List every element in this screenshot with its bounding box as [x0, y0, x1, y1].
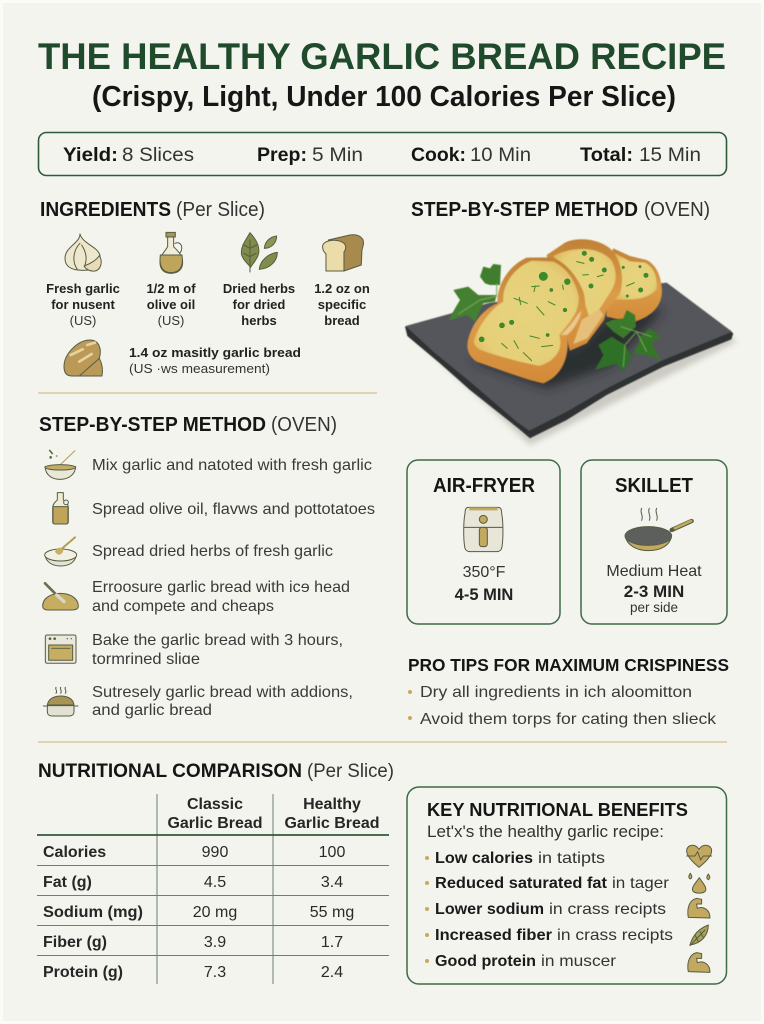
icon: muscle arm sodium [688, 898, 710, 918]
icon: serving dish [43, 687, 78, 716]
title: (Crispy, Light, Under 100 Calories Per Slice) [92, 81, 676, 113]
tip 2: Avoid them torps for cating then slieck [420, 711, 717, 728]
ingredients heading: INGREDIENTS [40, 199, 171, 221]
benefit 2: Reduced saturated fat [435, 875, 608, 892]
air-fryer settings: 350°F [463, 564, 506, 581]
panel: skillet [581, 460, 727, 624]
recipe timing bar: Total: [580, 144, 633, 166]
comparison table: 4.5 [204, 874, 226, 891]
benefit 2 [425, 875, 670, 892]
icon: skillet [625, 508, 692, 551]
ingredient labels: 1.2 oz on [314, 281, 370, 296]
icon: garlic bread loaf [64, 340, 103, 376]
ingredient labels: herbs [241, 313, 277, 328]
step 4 text [92, 579, 350, 615]
bread shadow on slate [470, 303, 663, 388]
step 5 text [92, 632, 343, 668]
garlic bread measurement text: (US ·ws measurement) [129, 361, 270, 376]
icon: garlic [65, 234, 101, 271]
comparison table: 55 mg [310, 904, 354, 921]
comparison table: Sodium (mg) [43, 904, 143, 921]
recipe timing bar: 8 Slices [122, 144, 194, 166]
comparison table: Fiber (g) [43, 934, 107, 951]
ingredient labels: for dried [233, 297, 285, 312]
comparison table: Protein (g) [43, 964, 123, 981]
icon: air fryer [464, 507, 503, 552]
air-fryer heading: AIR-FRYER [433, 475, 536, 497]
garlic bread measurement text [129, 345, 301, 376]
comparison table [37, 794, 389, 984]
icon: bread slice [323, 235, 364, 271]
comparison heading: (Per Slice) [307, 761, 394, 782]
panel: key nutritional benefits [407, 787, 726, 984]
title [38, 36, 726, 113]
comparison table: Healthy [303, 796, 361, 813]
panel: oven steps [39, 414, 375, 719]
benefit 3 [425, 901, 666, 918]
ingredient labels: specific [318, 297, 366, 312]
ingredients heading [40, 199, 265, 221]
skillet settings: 2-3 MIN [624, 582, 684, 601]
comparison table: Fat (g) [43, 874, 92, 891]
ingredient labels: (US) [158, 313, 184, 328]
icon: wheat [690, 925, 708, 946]
recipe timing bar: Cook: [411, 144, 466, 166]
panel: air-fryer [407, 460, 560, 624]
ingredient labels: for nusent [51, 297, 115, 312]
bread slice back [603, 248, 662, 323]
air-fryer settings: 4-5 MIN [455, 586, 513, 604]
air-fryer settings [455, 564, 513, 604]
benefit 2: in tager [612, 875, 670, 892]
ingredient labels: bread [324, 313, 360, 328]
panel: nutritional comparison [37, 761, 394, 984]
comparison table: 7.3 [204, 964, 226, 981]
step 5 text: Bake the garlic bread with 3 hours, [92, 632, 343, 649]
panel: pro tips [408, 655, 729, 728]
parsley left [448, 264, 501, 322]
skillet heading: SKILLET [615, 475, 693, 497]
icon: muscle arm protein [688, 953, 710, 972]
icon: bowl with spatula [45, 537, 77, 566]
step 1 text: Mix garlic and natoted with fresh garlic [92, 457, 372, 474]
icon: mixing bowl [45, 450, 76, 479]
ingredient labels: Dried herbs [223, 281, 295, 296]
comparison table: 990 [202, 844, 228, 861]
benefit 1: Low calories [435, 850, 533, 867]
comparison table: Garlic Bread [168, 815, 262, 832]
ingredients heading: (Per Slice) [176, 199, 265, 221]
comparison table: 20 mg [193, 904, 237, 921]
icon: spreading on bread [43, 583, 78, 610]
comparison table: Calories [43, 844, 106, 861]
ingredient labels: (US) [70, 313, 96, 328]
benefits heading: Let'x's the healthy garlic recipe: [427, 823, 664, 841]
recipe timing bar [38, 132, 726, 176]
icon: heart [687, 845, 712, 867]
step 6 text: Sutresely garlic bread with addions, [92, 684, 353, 701]
panel: ingredients [40, 199, 370, 376]
skillet settings: per side [630, 600, 678, 615]
recipe timing bar: 5 Min [312, 144, 363, 166]
skillet settings: Medium Heat [606, 563, 702, 580]
ingredient labels: olive oil [147, 297, 195, 312]
right column heading: STEP-BY-STEP METHOD [411, 199, 638, 221]
comparison table: Classic [187, 796, 243, 813]
slate board [405, 283, 733, 438]
steps heading: STEP-BY-STEP METHOD [39, 414, 266, 436]
recipe timing bar: Prep: [257, 144, 307, 166]
benefit 3: Lower sodium [435, 901, 544, 918]
comparison table: 3.4 [321, 874, 343, 891]
benefit 3: in crass recipts [549, 901, 666, 918]
icon: dried herbs [241, 233, 277, 272]
herb flecks [479, 251, 648, 361]
benefit 5: in muscer [541, 953, 617, 970]
step 6 text: and garlic bread [92, 702, 212, 719]
comparison table: Garlic Bread [284, 815, 380, 832]
step 5 text: tormrined sliɑe [92, 651, 200, 668]
benefit 1 [425, 850, 605, 867]
step 2 text: Spread olive oil, flavws and pottotatoes [92, 501, 375, 518]
comparison table: 100 [319, 844, 345, 861]
slate shadow [413, 290, 737, 445]
step 3 text: Spread dried herbs of fresh garlic [92, 543, 333, 560]
title: THE HEALTHY GARLIC BREAD RECIPE [38, 36, 726, 77]
benefit 4: Increased fiber [435, 927, 552, 944]
benefits heading: KEY NUTRITIONAL BENEFITS [427, 799, 688, 820]
photo: garlic bread on slate [405, 239, 737, 445]
icon: oven [45, 635, 76, 663]
benefit 4 [425, 927, 673, 944]
ingredient labels: 1/2 m of [146, 281, 196, 296]
benefit 1: in tatipts [538, 850, 605, 867]
steps heading: (OVEN) [271, 414, 337, 436]
parsley right [595, 310, 661, 372]
icon: water drops [689, 873, 710, 893]
benefit 4: in crass recipts [557, 927, 673, 944]
recipe timing bar: 10 Min [470, 144, 531, 166]
bread slice front [467, 257, 585, 383]
step 4 text: Erroosure garlic bread with icɘ head [92, 579, 350, 596]
bread slice middle [547, 239, 622, 351]
icon: oil bottle [53, 493, 68, 524]
pro tips heading: PRO TIPS FOR MAXIMUM CRISPINESS [408, 655, 729, 675]
recipe timing bar: Yield: [63, 144, 118, 166]
ingredient labels [46, 281, 370, 328]
skillet settings [606, 563, 702, 615]
garlic bread measurement text: 1.4 oz masitly garlic bread [129, 345, 301, 360]
recipe timing bar: 15 Min [639, 144, 701, 166]
step 6 text [92, 684, 353, 719]
comparison heading: NUTRITIONAL COMPARISON [38, 761, 302, 782]
comparison table: 2.4 [321, 964, 343, 981]
step 4 text: and compete and cheaps [92, 598, 274, 615]
tip 1: Dry all ingredients in ich aloomitton [420, 684, 692, 701]
icon: olive oil bottle [160, 232, 183, 273]
benefit 5: Good protein [435, 953, 536, 970]
ingredient labels: Fresh garlic [46, 281, 120, 296]
comparison table: 3.9 [204, 934, 226, 951]
benefit 5 [425, 953, 617, 970]
comparison table: 1.7 [321, 934, 343, 951]
right column heading: (OVEN) [644, 199, 710, 221]
benefits heading [427, 799, 688, 841]
